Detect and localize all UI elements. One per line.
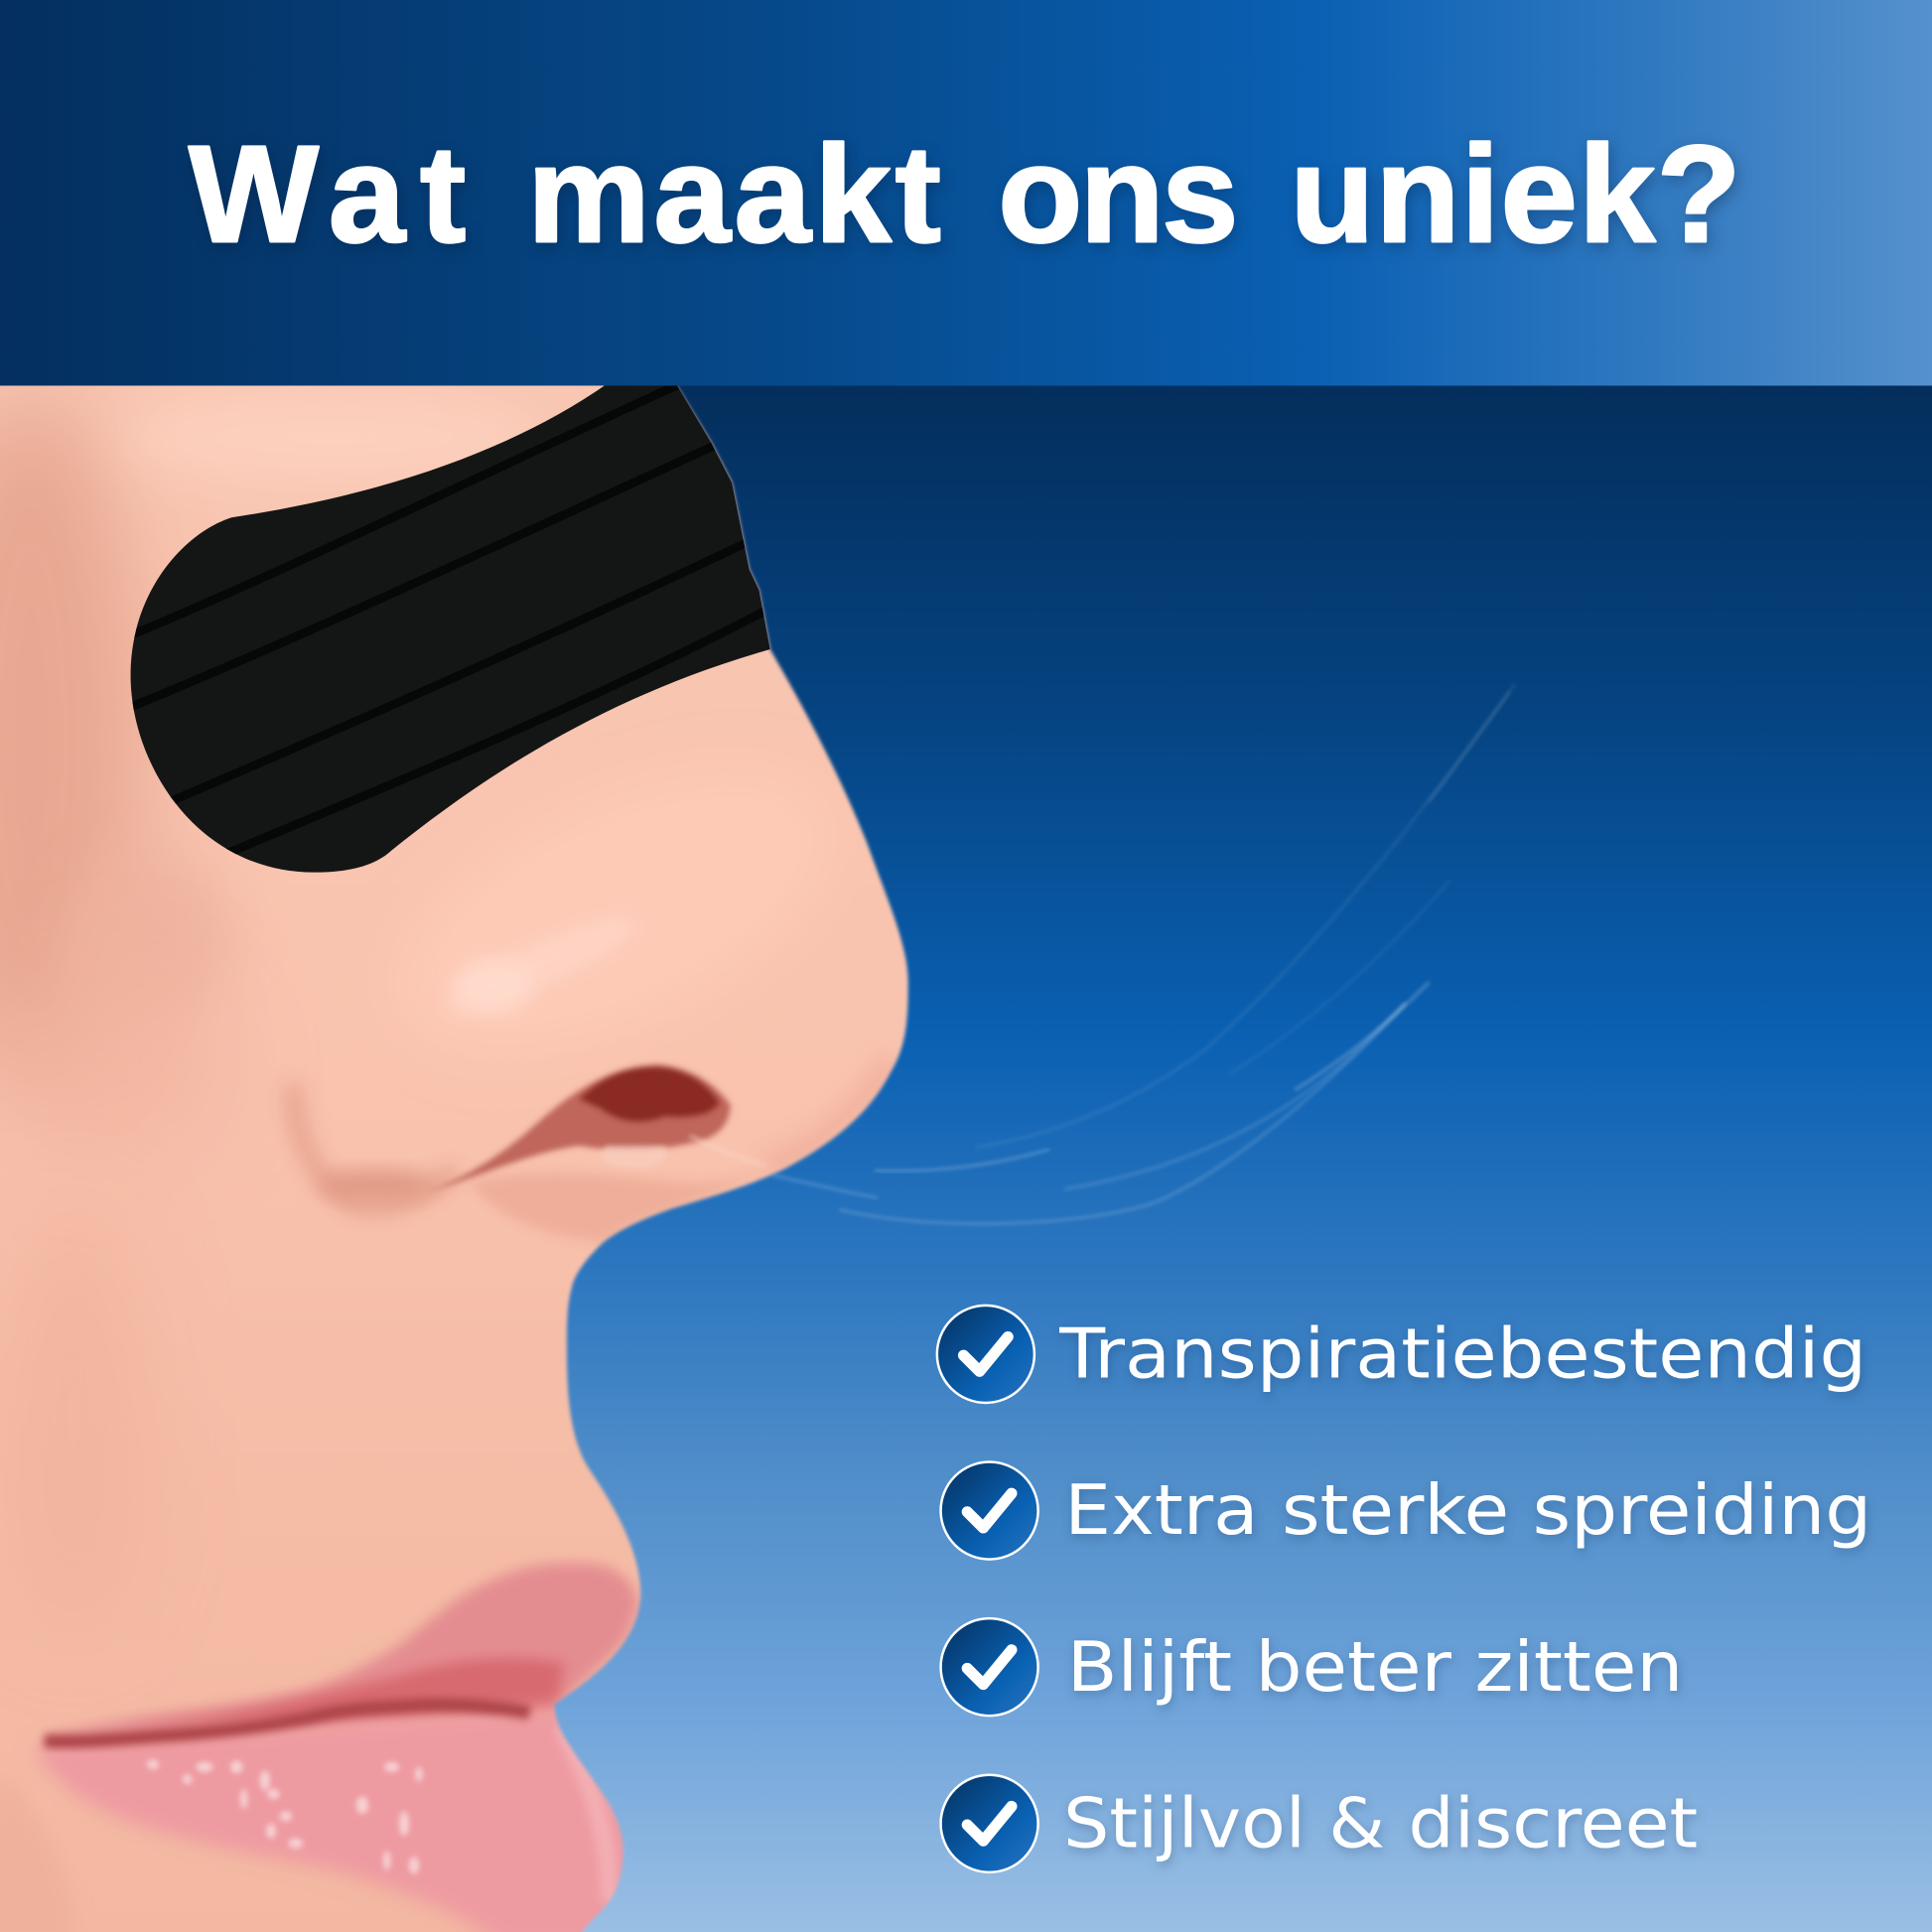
nose strip (121, 379, 776, 873)
icon: check badge (937, 1306, 1035, 1403)
skin and shading (0, 345, 936, 1932)
benefit: Stijlvol & discreet (941, 1775, 1698, 1872)
title: ons (998, 117, 1236, 271)
lower lip (36, 1707, 640, 1932)
face profile (0, 345, 936, 1932)
breath wisps (773, 685, 1514, 1224)
lip gloss speckles (147, 1759, 423, 1874)
label: Stijlvol & discreet (1063, 1783, 1698, 1863)
benefit: Extra sterke spreiding (941, 1462, 1871, 1560)
upper lip shadow (170, 1654, 567, 1727)
benefit: Transpiratiebestendig (937, 1306, 1866, 1403)
benefit: Blijft beter zitten (941, 1618, 1683, 1716)
icon: check badge (941, 1618, 1038, 1716)
icon: nostril (425, 1064, 766, 1192)
upper lip (50, 1563, 638, 1749)
header band (0, 0, 1932, 385)
lip parting line (45, 1705, 530, 1741)
icon: check badge (941, 1775, 1038, 1872)
label: Blijft beter zitten (1067, 1627, 1683, 1708)
label: Transpiratiebestendig (1058, 1314, 1866, 1395)
label: Extra sterke spreiding (1064, 1470, 1871, 1551)
lower lip highlight band (561, 1725, 610, 1903)
title: uniek? (1290, 117, 1742, 271)
strip ridges (121, 379, 776, 858)
title: Wat (189, 117, 481, 271)
title: maakt (527, 117, 945, 271)
icon: check badge (941, 1462, 1038, 1560)
